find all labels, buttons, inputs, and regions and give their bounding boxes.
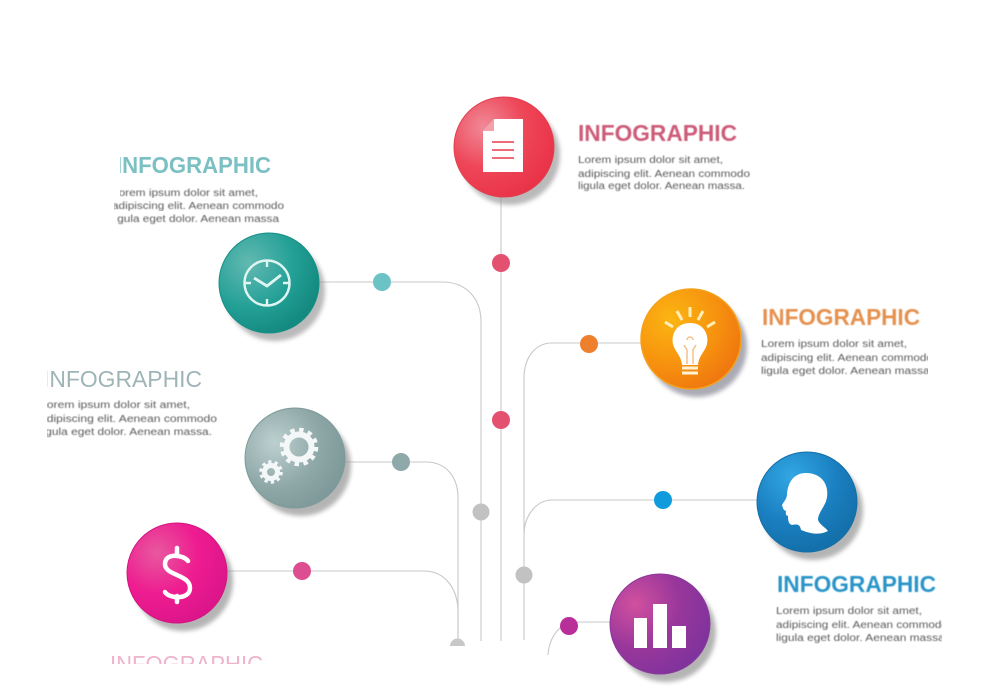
heading: gray: INFOGRAPHIC (43, 366, 202, 392)
heading: blue: INFOGRAPHIC (777, 571, 936, 597)
panel: blue head node (757, 452, 863, 560)
heading: teal: INFOGRAPHIC (116, 152, 271, 178)
panel: gray gears node (245, 408, 351, 516)
text block: orange: ligula eget dolor. Aenean massa. (761, 366, 933, 377)
icon: bar chart (634, 604, 686, 648)
text block: red (578, 155, 751, 192)
icon: bulb (665, 307, 715, 373)
text block: orange (761, 339, 934, 377)
node dots (293, 254, 672, 646)
text block: teal: ligula eget dolor. Aenean massa (112, 214, 280, 225)
text block: blue: ligula eget dolor. Aenean massa. (776, 633, 948, 644)
text block: gray: adipiscing elit. Aenean commodo (40, 414, 218, 425)
text block: red: adipiscing elit. Aenean commodo (578, 169, 751, 180)
icon: document (483, 119, 523, 172)
text block: teal: Lorem ipsum dolor sit amet, (112, 188, 258, 199)
text block: gray: ligula eget dolor. Aenean massa. (40, 427, 212, 438)
text block: red: ligula eget dolor. Aenean massa. (578, 181, 745, 192)
text block: gray (40, 400, 218, 438)
text block: orange: adipiscing elit. Aenean commodo (761, 353, 934, 364)
text block: teal: adipiscing elit. Aenean commodo (112, 201, 285, 212)
icon: dollar (165, 548, 190, 602)
text block: red: Lorem ipsum dolor sit amet, (578, 155, 723, 166)
text block: orange: Lorem ipsum dolor sit amet, (761, 339, 907, 350)
panel: purple bars node (610, 574, 716, 682)
icon: gears (261, 430, 316, 482)
text block: gray: Lorem ipsum dolor sit amet, (40, 400, 190, 411)
text block: blue: adipiscing elit. Aenean commodo (776, 620, 949, 631)
icon: head (782, 473, 828, 534)
heading: red: INFOGRAPHIC (578, 120, 737, 146)
panel: teal clock node (219, 233, 325, 341)
text block: teal (112, 188, 285, 225)
panel: pink dollar node (127, 523, 233, 631)
text block: blue: Lorem ipsum dolor sit amet, (776, 606, 922, 617)
text block: blue (776, 606, 949, 644)
icon: clock (244, 260, 290, 306)
panel: orange bulb node (641, 289, 747, 397)
connector lines (227, 195, 757, 655)
heading: pink, clipped: INFOGRAPHIC (110, 651, 263, 677)
heading: orange: INFOGRAPHIC (762, 304, 920, 330)
panel: red document node (454, 97, 560, 205)
